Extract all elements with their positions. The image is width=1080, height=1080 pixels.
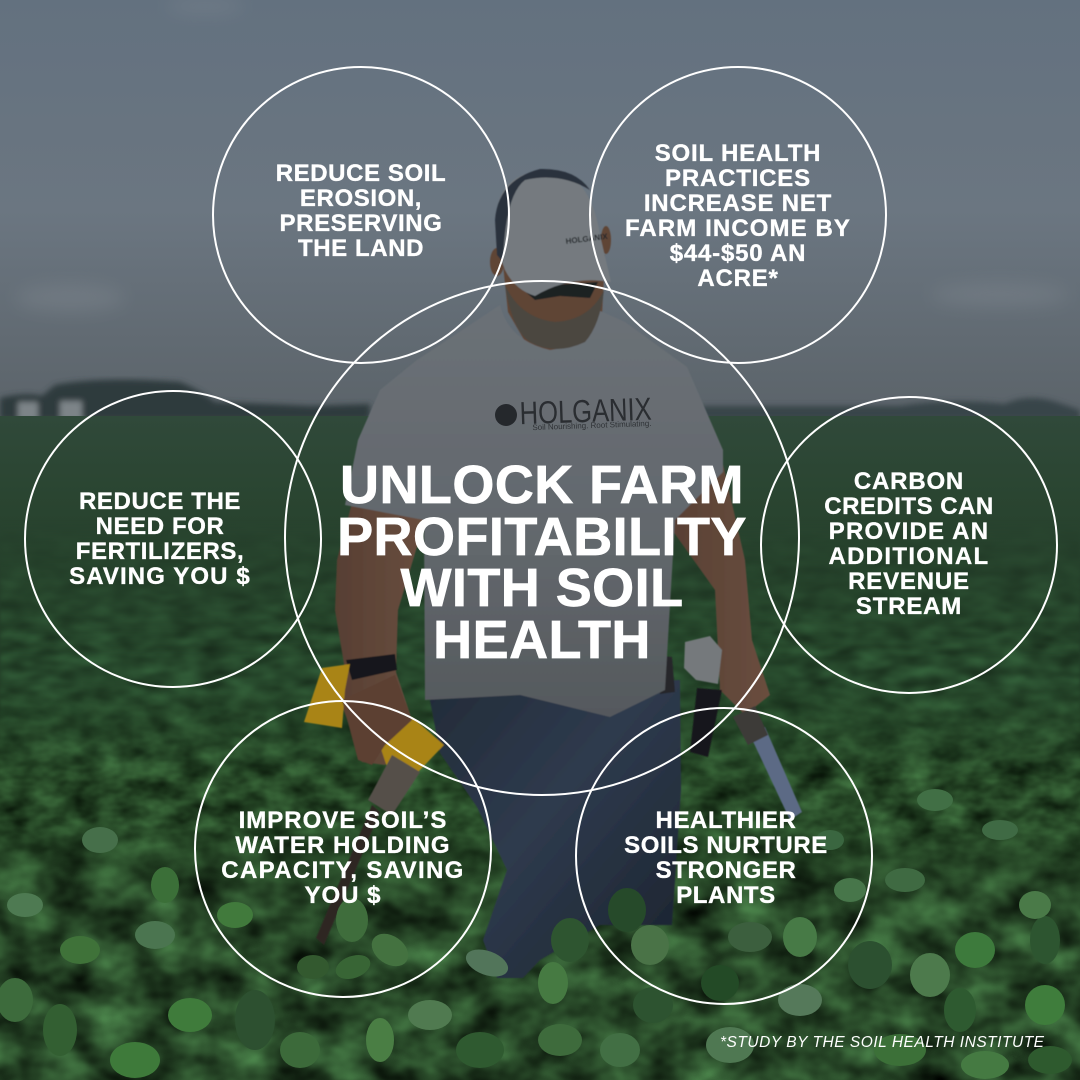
text: carbon credits: CREDITS CAN — [824, 493, 994, 520]
cap mesh — [495, 169, 590, 262]
text: stronger plants — [624, 807, 828, 909]
text: net farm income: INCREASE NET — [644, 190, 832, 217]
horizon trees and farm buildings — [0, 380, 1080, 420]
neck and face — [502, 255, 605, 350]
text: water holding: YOU $ — [304, 882, 382, 909]
logo on the shirt: Soil Nourishing. Root Stimulating. — [532, 419, 652, 432]
text: fertilizers: FERTILIZERS, — [76, 538, 244, 565]
circle: stronger plants — [575, 707, 873, 1005]
circle: water holding — [194, 700, 492, 998]
text: fertilizers: REDUCE THE — [79, 488, 241, 515]
logo on the shirt — [495, 391, 652, 432]
circle: fertilizers — [24, 390, 322, 688]
text: water holding: IMPROVE SOIL’S — [239, 807, 447, 834]
right arm — [665, 440, 770, 715]
title: PROFITABILITY — [337, 506, 747, 566]
title — [337, 455, 747, 670]
text: reduce soil erosion: PRESERVING — [280, 210, 442, 237]
title: UNLOCK FARM — [340, 455, 744, 515]
watch — [346, 654, 397, 680]
cap logo: HOLGANIX — [565, 232, 609, 246]
faint clouds — [15, 0, 1070, 312]
jeans — [428, 680, 681, 978]
text: reduce soil erosion — [276, 160, 446, 262]
drill chuck — [368, 755, 420, 815]
text: carbon credits — [824, 468, 994, 620]
text: carbon credits: ADDITIONAL — [828, 543, 989, 570]
text: carbon credits: REVENUE — [848, 568, 970, 595]
title: HEALTH — [433, 610, 651, 670]
text: net farm income: PRACTICES — [665, 165, 811, 192]
text: carbon credits: CARBON — [854, 468, 964, 495]
distant crop texture — [0, 564, 1080, 754]
footnote: *STUDY BY THE SOIL HEALTH INSTITUTE — [720, 1034, 1045, 1051]
circle: reduce soil erosion — [212, 66, 510, 364]
text: water holding: CAPACITY, SAVING — [221, 857, 465, 884]
text: stronger plants: PLANTS — [676, 882, 776, 909]
text: fertilizers: SAVING YOU $ — [69, 563, 251, 590]
ear — [490, 248, 504, 276]
text: stronger plants: HEALTHIER — [656, 807, 796, 834]
text: reduce soil erosion: THE LAND — [298, 235, 424, 262]
text: net farm income: SOIL HEALTH — [655, 140, 821, 167]
text: net farm income: FARM INCOME BY — [625, 215, 851, 242]
drill battery — [304, 664, 350, 728]
text: water holding — [221, 807, 465, 909]
circle: net farm income — [589, 66, 887, 364]
text: net farm income: ACRE* — [697, 265, 779, 292]
left hand — [342, 675, 412, 765]
farmer — [304, 169, 802, 978]
sky — [0, 0, 1080, 420]
title: WITH SOIL — [400, 558, 684, 618]
logo on the shirt: HOLGANIX — [519, 391, 652, 431]
belt pouch — [655, 655, 675, 694]
text: carbon credits: STREAM — [856, 593, 962, 620]
text: stronger plants: STRONGER — [656, 857, 796, 884]
drill body — [378, 717, 444, 782]
text: net farm income — [625, 140, 851, 292]
circle: central — [284, 280, 800, 796]
text: carbon credits: PROVIDE AN — [829, 518, 989, 545]
tool pole — [750, 727, 802, 820]
tool sensor — [684, 636, 722, 684]
text: net farm income: $44-$50 AN — [670, 240, 806, 267]
text: fertilizers — [69, 488, 251, 590]
text: fertilizers: NEED FOR — [96, 513, 224, 540]
sunglasses — [520, 282, 598, 300]
beard — [505, 285, 604, 349]
text: water holding: WATER HOLDING — [235, 832, 451, 859]
cap — [498, 170, 611, 296]
text: reduce soil erosion: EROSION, — [300, 185, 422, 212]
middle crop texture — [0, 696, 1080, 874]
text: reduce soil erosion: REDUCE SOIL — [276, 160, 446, 187]
field — [0, 416, 1080, 1080]
foreground soybean leaves — [0, 789, 1072, 1079]
tool handle — [690, 688, 722, 757]
left arm — [335, 480, 425, 765]
t-shirt — [345, 305, 723, 717]
circle: carbon credits — [760, 396, 1058, 694]
near crop texture — [0, 820, 1080, 1080]
drill bit — [316, 805, 380, 945]
text: stronger plants: SOILS NURTURE — [624, 832, 828, 859]
